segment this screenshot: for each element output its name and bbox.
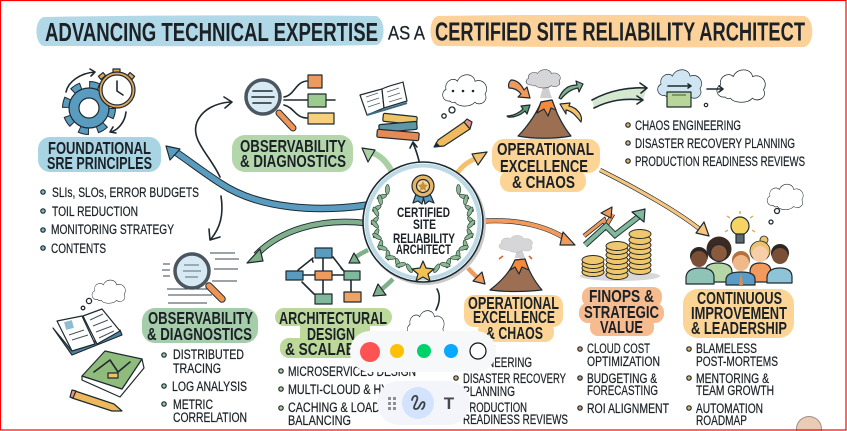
list: finops items: BUDGETING &: [587, 371, 657, 386]
heading: continuous improvement and leadership: [683, 288, 794, 338]
heading: foundational sre principles: [38, 137, 161, 173]
arrow: thin black curve between observability sections: [196, 97, 232, 240]
heading: observability and diagnostics lower: [142, 308, 258, 344]
heading: architectural design and scalability: ARCHITECTURAL: [279, 308, 387, 328]
list: foundational items: [41, 185, 199, 256]
list: chaos items lower: READINESS REVIEWS: [463, 412, 568, 427]
arrow: green to observability lower: [247, 222, 365, 263]
arrow: green to architecture heading: [373, 279, 393, 296]
badge text: [393, 204, 455, 257]
list: foundational items: SLIs, SLOs, ERROR BUDGETS: [52, 185, 199, 200]
icon: medal: [412, 175, 434, 204]
heading: operational excellence top: OPERATIONAL: [497, 139, 594, 159]
list: observability items: LOG ANALYSIS: [172, 379, 247, 394]
heading: architectural design and scalability: DESIGN: [307, 324, 355, 344]
list: architecture items: [279, 364, 416, 428]
heading: architectural design and scalability: & SCALABILITY: [285, 339, 389, 359]
list: observability items: CORRELATION: [173, 410, 247, 425]
list: observability items: TRACING: [173, 361, 221, 376]
heading: continuous improvement and leadership: IMPROVEMENT: [691, 303, 787, 323]
arrow: blue to foundational principles: [166, 146, 368, 208]
arrow: yellow to operational excellence: [456, 152, 487, 175]
icon: volcano top: [507, 70, 583, 138]
list: chaos items lower: [454, 342, 568, 427]
arrow: orange to finops: [484, 221, 575, 245]
icon: light bulb: [725, 211, 755, 243]
heading: operational excellence lower: & CHAOS: [486, 323, 543, 343]
avatar: corner face: [796, 416, 822, 431]
icon: lower-left pencil: [70, 390, 122, 411]
toolbar: colour palette: [350, 331, 496, 372]
heading: architectural design and scalability: [275, 308, 392, 359]
list: chaos items lower: CHAOS: [463, 342, 496, 357]
badge text: ARCHITECT: [396, 241, 451, 257]
icon: center bottom thought cloud: [407, 289, 444, 340]
heading: continuous improvement and leadership: & LEADERSHIP: [691, 318, 787, 338]
icon: lower-left green book: [82, 351, 144, 397]
badge text: CERTIFIED: [397, 204, 450, 220]
heading: finops and strategic value: FINOPS &: [589, 286, 654, 306]
list: finops items: OPTIMIZATION: [587, 354, 660, 369]
list: chaos items lower: DISASTER RECOVERY: [463, 371, 566, 386]
heading: finops and strategic value: [579, 286, 664, 337]
icon: lower-left open book: [53, 309, 122, 355]
arrow: long orange to continuous improvement: [600, 170, 709, 236]
list: leadership items: AUTOMATION: [696, 401, 763, 416]
arrow: pair to cloud migration: [592, 83, 647, 108]
icon: growth arrows and coins: [580, 207, 660, 281]
heading: observability and diagnostics lower: & DIAGNOSTICS: [147, 324, 252, 344]
heading: continuous improvement and leadership: CONTINUOUS: [697, 288, 782, 308]
heading: operational excellence lower: [464, 293, 563, 343]
heading: foundational sre principles: FOUNDATIONAL: [48, 138, 151, 158]
list: foundational items: TOIL REDUCTION: [52, 204, 138, 219]
list: leadership items: TEAM GROWTH: [696, 383, 774, 398]
list: finops items: CLOUD COST: [587, 341, 650, 356]
icon: team of people: [686, 236, 792, 285]
list: chaos items lower: ENGINEERING: [463, 355, 532, 370]
toolbar: drawing tools: T: [444, 394, 455, 413]
arrow: thin to books: [410, 142, 420, 165]
heading: operational excellence top: & CHAOS: [512, 172, 575, 192]
list: chaos items lower: PRODUCTION: [463, 400, 527, 415]
arrow: green to observability top: [362, 148, 392, 172]
coin stacks: [582, 230, 651, 280]
list: chaos items lower: PLANNING: [463, 384, 515, 399]
toolbar: drawing tools: [377, 381, 470, 425]
icon: open book and stack of books: [360, 82, 419, 141]
badge text: RELIABILITY: [393, 230, 455, 246]
list: observability items: [162, 347, 247, 425]
icon: lower-left thought cloud: [81, 280, 125, 310]
heading: observability and diagnostics lower: OBSERVABILITY: [148, 308, 253, 328]
laurel wreath: [370, 183, 476, 274]
icon: magnifier with boxes: [246, 75, 335, 128]
list: leadership items: BLAMELESS: [696, 341, 757, 356]
heading: finops and strategic value: VALUE: [600, 317, 643, 337]
arrow: orange to lower volcano: [468, 268, 485, 284]
list: finops items: FORECASTING: [587, 383, 658, 398]
list: chaos items top: CHAOS ENGINEERING: [635, 118, 741, 133]
list: observability items: DISTRIBUTED: [173, 347, 244, 362]
icon: architecture flow diagram: [286, 248, 361, 304]
icon: lower magnifier with lines: [162, 253, 239, 303]
central badge: [363, 162, 486, 285]
list: architecture items: CACHING & LOAD: [288, 400, 380, 415]
icon: star: [412, 261, 434, 281]
heading: operational excellence top: EXCELLENCE: [500, 156, 588, 176]
list: architecture items: BALANCING: [288, 413, 351, 428]
icon: thought cloud right: [767, 184, 803, 224]
heading: observability and diagnostics top: OBSERVABILITY: [240, 136, 346, 156]
heading: operational excellence top: [492, 139, 600, 192]
heading: operational excellence lower: OPERATIONAL: [468, 293, 559, 313]
title: [36, 15, 812, 47]
list: architecture items: MULTI-CLOUD & HYBRID: [288, 382, 414, 397]
list: leadership items: [687, 341, 778, 428]
list: architecture items: MICROSERVICES DESIGN: [288, 364, 416, 379]
icon: pencil: [434, 119, 472, 147]
title: AS A: [388, 24, 425, 44]
list: finops items: [578, 341, 669, 416]
heading: finops and strategic value: STRATEGIC: [584, 302, 659, 322]
heading: foundational sre principles: SRE PRINCIPLES: [47, 153, 152, 173]
badge text: SITE: [413, 216, 436, 232]
title: ADVANCING TECHNICAL EXPERTISE: [45, 17, 378, 47]
heading: observability and diagnostics top: & DIAGNOSTICS: [240, 151, 346, 171]
list: leadership items: ROADMAP: [696, 413, 747, 428]
list: observability items: METRIC: [173, 397, 213, 412]
list: chaos items top: [626, 118, 805, 169]
icon: thought bubble with dots: [442, 75, 487, 118]
list: leadership items: MENTORING &: [696, 371, 769, 386]
list: finops items: ROI ALIGNMENT: [587, 401, 669, 416]
arrow: green to architecture diagram: [349, 250, 368, 263]
list: foundational items: CONTENTS: [51, 241, 106, 256]
heading: observability and diagnostics top: [232, 135, 353, 172]
icon: gear and stopwatch: [66, 69, 135, 133]
icon: clouds with box: [658, 70, 765, 107]
icon: volcano lower: [490, 235, 542, 292]
list: foundational items: MONITORING STRATEGY: [51, 222, 174, 237]
heading: operational excellence lower: EXCELLENCE: [473, 307, 555, 327]
list: leadership items: POST-MORTEMS: [696, 354, 778, 369]
